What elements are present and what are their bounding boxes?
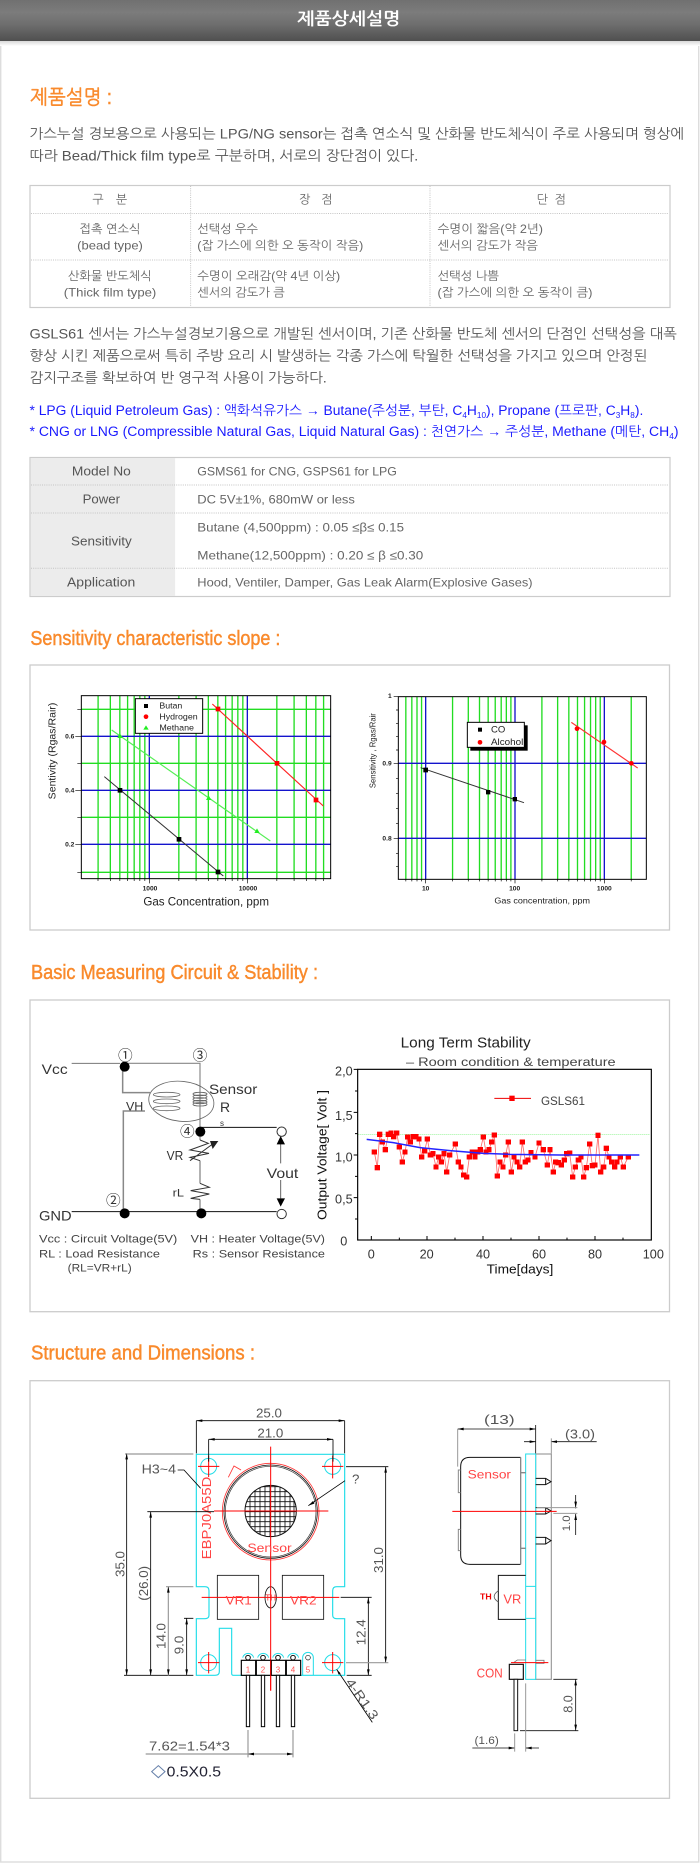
- circuit labels: ②: [106, 1193, 121, 1210]
- header bar: 제품상세설명: [297, 10, 400, 28]
- board outline: [196, 1454, 345, 1675]
- axis labels: 20: [420, 1248, 434, 1262]
- gas notes in blue: 4: [462, 411, 467, 420]
- row: bead type: (bead type): [77, 238, 143, 252]
- red labels: TH: [265, 1594, 276, 1603]
- circuit labels: VH: [126, 1100, 143, 1114]
- GSLS61 description paragraph: 감지구조를 확보하여 반 영구적 사용이 가능하다.: [30, 370, 327, 386]
- gas notes in blue: ), Propane (프로판, C: [486, 403, 616, 418]
- hydrogen series: [212, 704, 323, 806]
- gas notes in blue: H: [620, 403, 630, 418]
- GSLS61 data series: [374, 1133, 628, 1177]
- circuit labels: GND: [39, 1208, 72, 1224]
- table header row: 단 점: [537, 192, 566, 206]
- axis labels: 1,0: [335, 1150, 353, 1164]
- gas notes in blue: ).: [635, 403, 643, 418]
- row: sensitivity: [71, 520, 424, 562]
- legend: [467, 722, 528, 751]
- row: sensitivity: Butane (4,500ppm) : 0.05 ≤β≤ 0.15: [197, 520, 404, 534]
- axis labels: 0.8: [382, 836, 392, 843]
- circuit legend: Vcc : Circuit Voltage(5V): [39, 1234, 177, 1246]
- axis labels: 100: [643, 1248, 664, 1262]
- row: application: [67, 575, 533, 590]
- chart title: – Room condition & temperature: [406, 1055, 616, 1069]
- connector: 2: [261, 1666, 266, 1675]
- red labels: VR: [503, 1592, 521, 1606]
- row: model no: Model No: [72, 464, 131, 478]
- gas notes in blue: [30, 403, 678, 441]
- row: power: Power: [83, 492, 120, 506]
- axis labels: 80: [588, 1248, 602, 1262]
- row: model no: GSMS61 for CNG, GSPS61 for LPG: [197, 464, 397, 478]
- chart: sensitivity vs gas concentration (butan, hydrogen, methane): [48, 696, 331, 908]
- axis labels: 1,5: [335, 1109, 353, 1123]
- panel: circuit and stability: [30, 1000, 670, 1312]
- dimension labels: H3~4: [142, 1462, 177, 1477]
- dimension labels: [474, 1413, 595, 1747]
- axis labels: 0: [340, 1234, 347, 1248]
- dimension labels: (3.0): [565, 1427, 595, 1441]
- table header row: [92, 192, 566, 206]
- axis labels: [48, 703, 269, 908]
- dimension labels: [113, 1406, 386, 1753]
- chart: sensitivity vs gas concentration (CO, alcohol): [368, 693, 646, 906]
- axis labels: [314, 1064, 664, 1276]
- red labels: VR1: [226, 1593, 252, 1607]
- row: bead type: 수명이 짧음(약 2년): [438, 222, 543, 236]
- comparison table: [30, 186, 670, 308]
- connector: [509, 1660, 544, 1731]
- heading: measuring circuit and stability: Basic Measuring Circuit & Stability :: [31, 962, 318, 984]
- row: thick film type: [64, 269, 592, 299]
- red labels: TH: [480, 1592, 492, 1602]
- variable resistors: [217, 1575, 324, 1619]
- table header row: 장 점: [299, 192, 333, 206]
- trend line: [367, 1139, 639, 1155]
- connector: 1: [246, 1666, 251, 1675]
- circuit labels: [39, 1047, 298, 1224]
- axis labels: 0.2: [65, 842, 75, 849]
- row: sensitivity: Sensitivity: [71, 534, 132, 548]
- row: bead type: 접촉 연소식: [80, 222, 140, 236]
- axis labels: 0.9: [382, 761, 392, 768]
- drawing: side view of sensor board: [452, 1413, 597, 1752]
- row: model no: [72, 464, 397, 478]
- circuit labels: Vcc: [42, 1061, 68, 1077]
- row: bead type: [77, 222, 543, 252]
- dimensions: [124, 1421, 388, 1757]
- axis labels: 1000: [143, 886, 158, 893]
- circuit labels: ①: [118, 1047, 133, 1064]
- CO series: [421, 768, 524, 803]
- gas notes in blue: * CNG or LNG (Compressible Natural Gas, Liquid Natural Gas) : 천연가스 → 주성분, Methane (메탄, CH: [30, 424, 648, 439]
- nodes: [120, 1062, 286, 1219]
- gas notes in blue: 3: [616, 411, 621, 420]
- axis labels: 0: [368, 1248, 375, 1262]
- circuit legend: (RL=VR+rL): [68, 1263, 132, 1275]
- axis labels: 1000: [597, 886, 612, 893]
- dimension labels: (13): [484, 1413, 515, 1427]
- GSLS61 description paragraph: GSLS61 센서는 가스누설경보기용으로 개발된 센서이며, 기존 산화물 반도체 센서의 단점인 선택성을 대폭: [30, 325, 677, 341]
- dimension labels: 35.0: [113, 1551, 128, 1577]
- header bar: [0, 0, 700, 46]
- dimension labels: 1.0: [561, 1515, 573, 1531]
- axis labels: [368, 693, 612, 906]
- arrow: Vout: [277, 1136, 285, 1207]
- sensor can: [222, 1463, 319, 1560]
- row: sensitivity: Methane(12,500ppm) : 0.20 ≤ β ≤0.30: [197, 548, 424, 562]
- row: thick film type: 센서의 감도가 큼: [197, 285, 285, 299]
- connector: [241, 1652, 313, 1727]
- row: power: [83, 492, 355, 506]
- pin size note: 0.5X0.5: [167, 1765, 221, 1781]
- legend: [135, 699, 203, 733]
- circuit labels: ③: [193, 1047, 208, 1064]
- centre lines: [452, 1511, 557, 1663]
- legend: Methane: [159, 723, 194, 733]
- axis labels: 10000: [239, 886, 258, 893]
- axis labels: 10: [422, 886, 430, 893]
- mounting holes: [198, 1456, 343, 1673]
- dimension labels: 7.62=1.54*3: [149, 1738, 230, 1753]
- dimension labels: 21.0: [257, 1425, 283, 1440]
- circuit labels: s: [220, 1119, 224, 1128]
- VR block: [494, 1575, 526, 1619]
- dimension labels: ?: [352, 1472, 359, 1487]
- row: thick film type: (잡 가스에 의한 오 동작이 큼): [438, 285, 592, 299]
- gas notes in blue: ): [674, 424, 678, 439]
- circuit labels: R: [220, 1099, 230, 1115]
- axis labels: 2,0: [335, 1064, 353, 1078]
- panel: structure and dimensions: [30, 1381, 670, 1798]
- row: thick film type: 선택성 나쁨: [438, 269, 499, 283]
- intro paragraph: 가스누설 경보용으로 사용되는 LPG/NG sensor는 접촉 연소식 및 산화물 반도체식이 주로 사용되며 형상에: [30, 126, 684, 142]
- chart: long term stability: [314, 1036, 664, 1276]
- circuit labels: rL: [173, 1188, 184, 1200]
- connector: 3: [276, 1666, 281, 1675]
- GSLS61 description paragraph: [30, 325, 677, 386]
- gas notes in blue: H: [467, 403, 477, 418]
- heading: structure and dimensions: Structure and Dimensions :: [31, 1342, 255, 1364]
- gas notes in blue: 8: [630, 411, 635, 420]
- red labels: CON: [477, 1666, 503, 1680]
- dimension labels: (1.6): [474, 1735, 499, 1747]
- red labels: [199, 1477, 317, 1607]
- gas notes in blue: 10: [477, 411, 487, 420]
- legend: [494, 1094, 585, 1108]
- circuit legend: VH : Heater Voltage(5V): [191, 1234, 325, 1246]
- circuit legend: [39, 1234, 325, 1275]
- red labels: [468, 1467, 521, 1680]
- panel: sensitivity charts: [30, 665, 670, 930]
- gas notes in blue: 4: [669, 432, 674, 441]
- legend: Hydrogen: [159, 712, 198, 722]
- row: application: Application: [67, 576, 135, 590]
- alcohol series: [571, 722, 638, 768]
- legend: Butan: [159, 701, 183, 711]
- dimension labels: 9.0: [172, 1636, 187, 1654]
- legend: Alcohol: [491, 737, 523, 747]
- heading: product description: 제품설명 :: [30, 87, 112, 109]
- circuit labels: Vout: [267, 1165, 298, 1181]
- axis labels: Gas Concentration, ppm: [143, 895, 269, 908]
- circuit legend: Rs : Sensor Resistance: [193, 1248, 325, 1260]
- dimension labels: 31.0: [371, 1547, 386, 1573]
- sensor element: [147, 1078, 216, 1125]
- circuit labels: VR: [167, 1149, 183, 1163]
- pins: [536, 1478, 551, 1544]
- centre lines: [202, 1447, 339, 1691]
- circuit labels: ④: [180, 1124, 195, 1141]
- axis labels: 100: [509, 886, 521, 893]
- drawing: front view of sensor board: [113, 1406, 388, 1781]
- intro paragraph: [30, 126, 684, 164]
- connector: 4: [291, 1666, 296, 1675]
- chart title: Long Term Stability: [401, 1036, 532, 1052]
- wires: [72, 1063, 281, 1212]
- legend: CO: [491, 725, 505, 735]
- sensor body: [458, 1457, 526, 1564]
- circuit legend: RL : Load Resistance: [39, 1248, 160, 1260]
- row: bead type: 선택성 우수: [197, 222, 258, 236]
- row: thick film type: 수명이 오래감(약 4년 이상): [197, 269, 340, 283]
- board: [526, 1454, 551, 1679]
- axis labels: 0.6: [65, 734, 75, 741]
- row: bead type: 센서의 감도가 작음: [438, 238, 538, 252]
- axis labels: 0,5: [335, 1193, 353, 1207]
- circuit labels: Sensor: [209, 1081, 258, 1097]
- axis labels: 0.4: [65, 788, 75, 795]
- row: thick film type: (Thick film type): [64, 285, 156, 299]
- intro paragraph: 따라 Bead/Thick film type로 구분하며, 서로의 장단점이 있다.: [30, 148, 418, 164]
- dimension labels: 8.0: [562, 1695, 576, 1713]
- dimension labels: 4-R1.3: [343, 1676, 381, 1722]
- heading: sensitivity slope: Sensitivity characteristic slope :: [30, 628, 280, 650]
- axis labels: Time[days]: [487, 1261, 553, 1276]
- connector: 5: [306, 1666, 311, 1675]
- dimension labels: 14.0: [154, 1623, 169, 1649]
- table header row: 구 분: [92, 192, 127, 206]
- axis labels: 1: [388, 693, 392, 700]
- red labels: EBPJ0A55D: [199, 1477, 214, 1559]
- specification table: [30, 458, 670, 596]
- row: application: Hood, Ventiler, Damper, Gas Leak Alarm(Explosive Gases): [197, 575, 533, 589]
- sensor mesh: [246, 1486, 296, 1536]
- axis labels: Gas concentration, ppm: [494, 896, 590, 906]
- red labels: VR2: [290, 1593, 317, 1607]
- axis labels: Output Voltage[ Volt ]: [314, 1090, 329, 1220]
- resistors: [190, 1140, 218, 1199]
- axis labels: 60: [532, 1248, 546, 1262]
- row: power: DC 5V±1%, 680mW or less: [197, 492, 355, 506]
- gas notes in blue: * LPG (Liquid Petroleum Gas) : 액화석유가스 → Butane(주성분, 부탄, C: [30, 403, 452, 418]
- row: bead type: (잡 가스에 의한 오 동작이 작음): [197, 238, 363, 252]
- dimensions: [458, 1425, 597, 1752]
- chart title: [401, 1036, 616, 1069]
- axis labels: 40: [476, 1248, 490, 1262]
- legend: GSLS61: [541, 1094, 585, 1108]
- dimension labels: 12.4: [354, 1619, 369, 1645]
- red labels: Sensor: [247, 1541, 292, 1555]
- axis labels: Sentivity (Rgas/Rair): [48, 703, 59, 799]
- dimension labels: 25.0: [256, 1406, 282, 1421]
- GSLS61 description paragraph: 향상 시킨 제품으로써 특히 주방 요리 시 발생하는 각종 가스에 탁월한 선택성을 가지고 있으며 안정된: [30, 347, 647, 363]
- dimension labels: (26.0): [136, 1566, 151, 1601]
- axis labels: Sensitivity , Rgas/Rair: [368, 713, 378, 788]
- row: thick film type: 산화물 반도체식: [68, 269, 152, 283]
- butan series: [104, 777, 223, 876]
- red labels: Sensor: [468, 1467, 511, 1481]
- methane series: [112, 730, 270, 841]
- circuit diagram: [39, 1047, 325, 1275]
